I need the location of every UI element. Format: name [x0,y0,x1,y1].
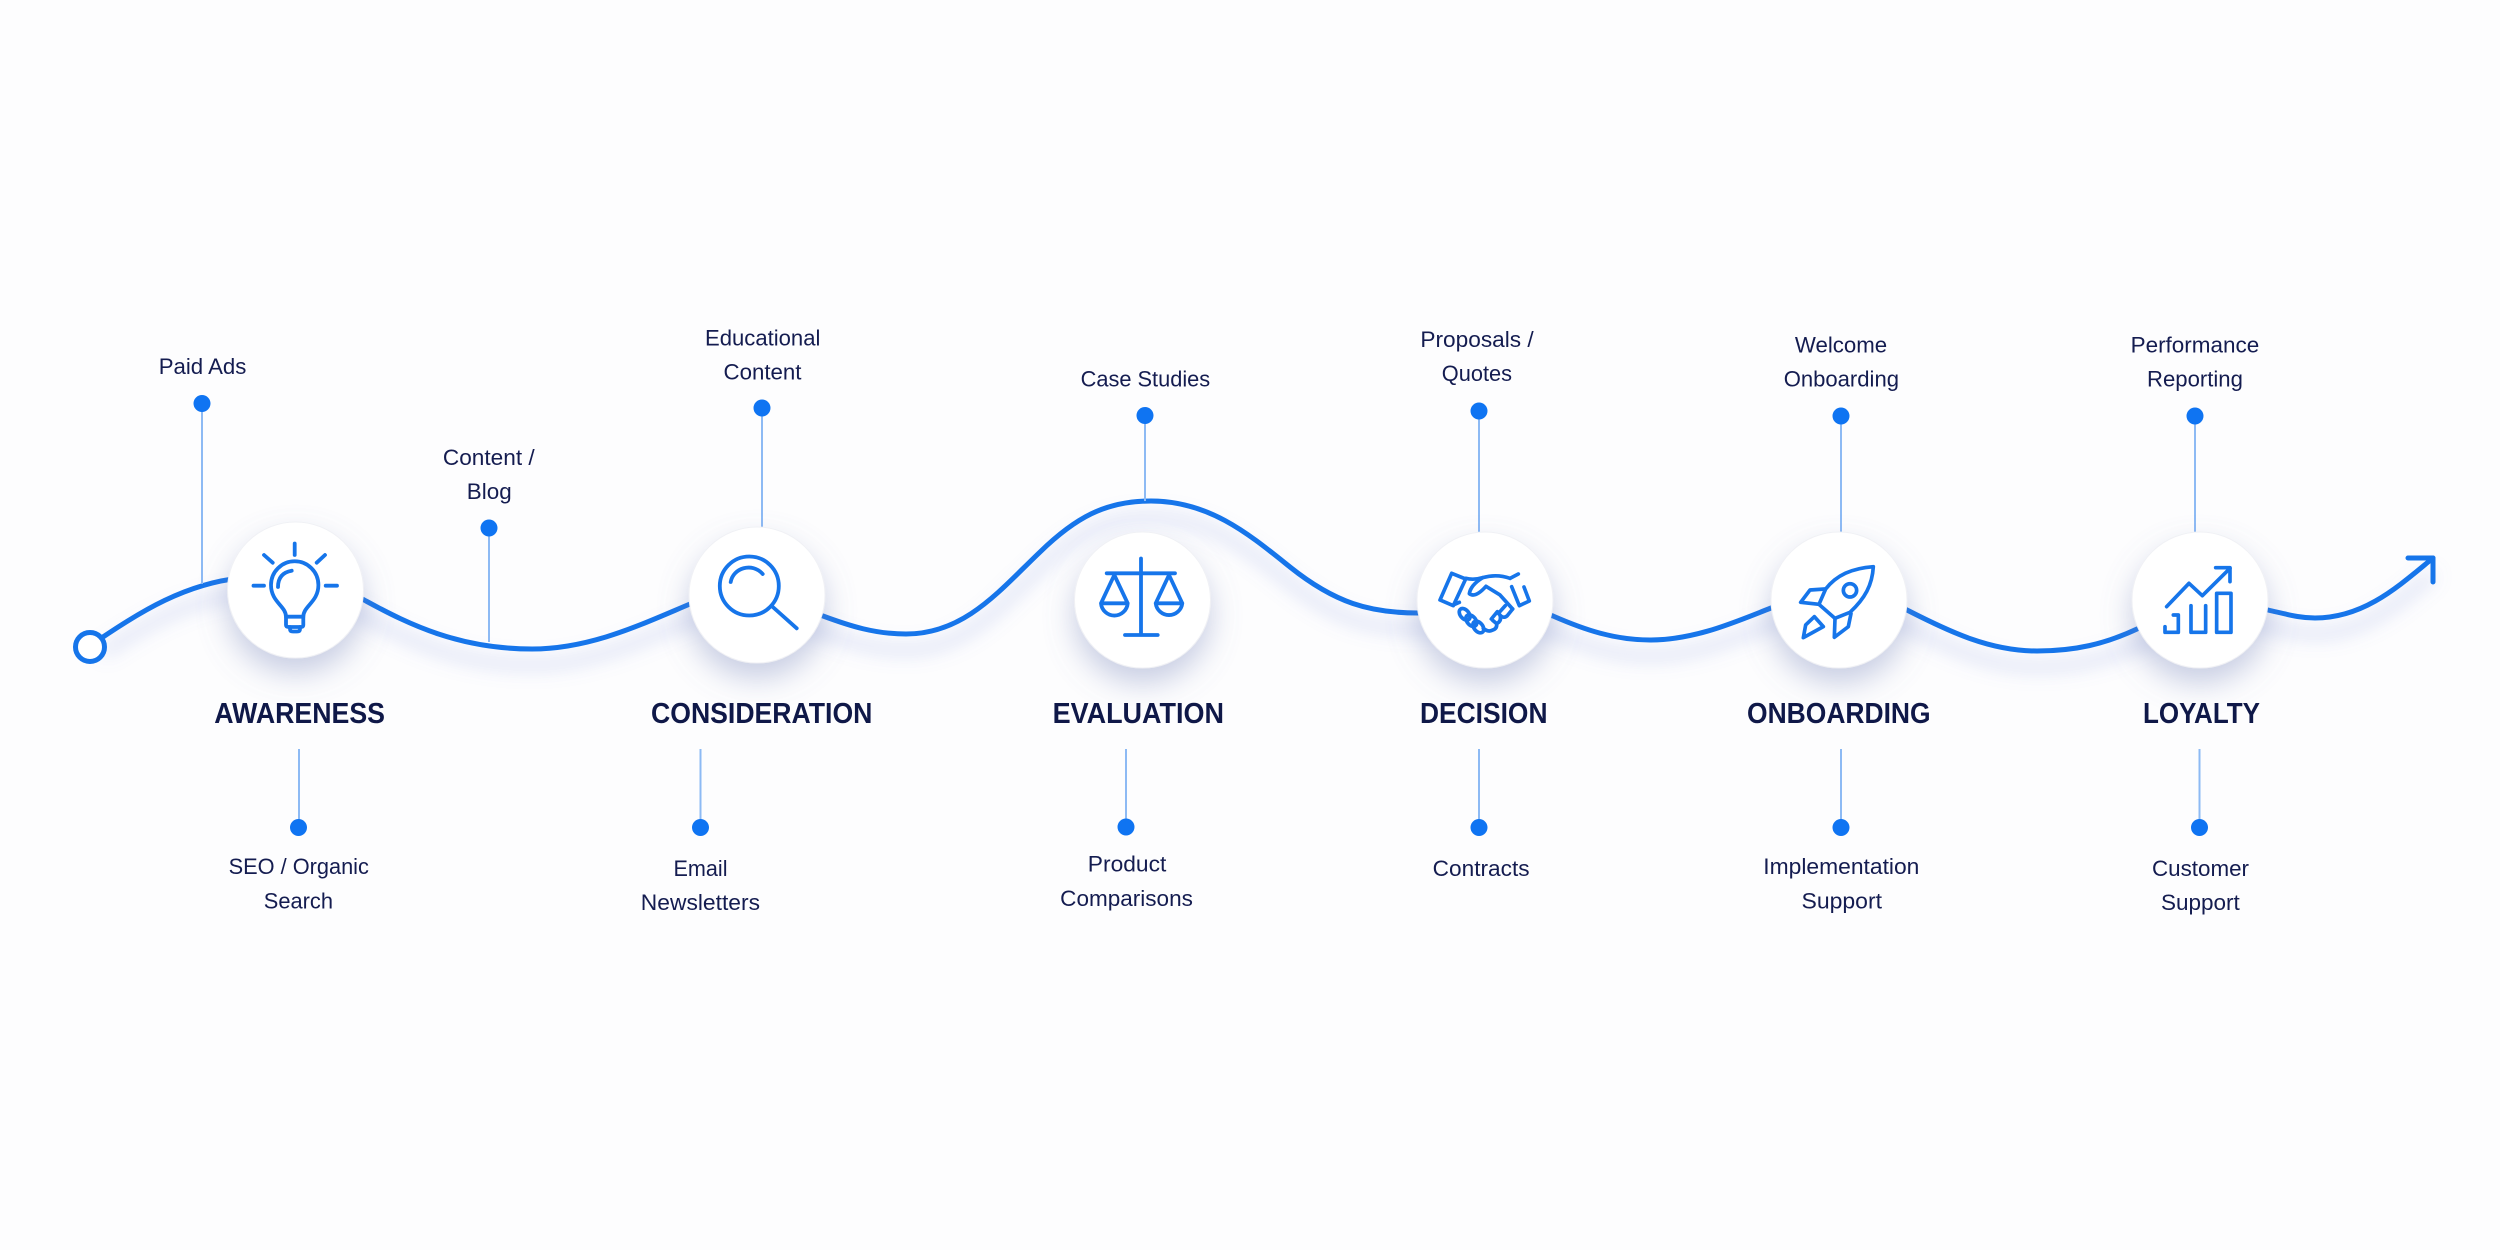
label: welcome onboarding [1784,332,1899,391]
icon badge: onboarding [1771,532,1907,668]
icon: scales [1101,558,1182,635]
label: implementation support: Support [1802,888,1883,914]
icon badge: loyalty [2132,532,2268,668]
connector: customer support [2191,749,2208,836]
label: seo organic search: Search [264,888,333,914]
connector: educational content [754,400,770,528]
journey curve line [103,501,2433,651]
icon badge: awareness [228,522,364,658]
icon: handshake [1440,573,1529,635]
label: implementation support [1763,854,1919,914]
label: welcome onboarding: Onboarding [1784,366,1899,391]
arrow head [2408,558,2433,582]
label: seo organic search [229,854,369,914]
connector: contracts [1470,749,1488,836]
label: proposals quotes [1420,327,1534,386]
label: email newsletters [641,856,760,915]
label: proposals quotes: Quotes [1442,361,1512,386]
label: educational content: Educational [705,326,820,351]
connector: welcome onboarding [1832,408,1850,533]
label: email newsletters: Email [674,856,728,881]
connector: content blog [480,520,498,642]
label: product comparisons [1060,851,1193,911]
icon badge: decision [1417,532,1553,668]
label: performance reporting: Reporting [2147,366,2243,391]
stage: decision [1417,327,1553,881]
label: customer support: Support [2161,890,2241,915]
connector: product comparisons [1118,749,1134,836]
connector: implementation [1832,749,1850,836]
stage: awareness [159,354,535,914]
label: email newsletters: Newsletters [641,890,760,915]
heading: evaluation: EVALUATION [1053,698,1224,730]
label: paid ads: Paid Ads [159,354,246,379]
heading: onboarding: ONBOARDING [1747,698,1931,730]
connector: proposals [1470,402,1488,533]
label: educational content [705,326,820,384]
icon: rocket [1801,567,1873,638]
label: performance reporting [2131,332,2259,391]
label: implementation support: Implementation [1763,854,1919,879]
label: product comparisons: Comparisons [1060,886,1193,911]
heading: decision: DECISION [1420,698,1548,730]
stage: onboarding [1747,332,1931,913]
label: case studies: Case Studies [1081,366,1210,391]
label: customer support [2152,856,2249,915]
connector: paid ads [194,395,210,584]
icon: light bulb [254,544,337,632]
label: seo organic search: SEO / Organic [229,854,369,879]
label: welcome onboarding: Welcome [1795,332,1887,357]
label: performance reporting: Performance [2131,332,2259,357]
connector: case studies [1136,407,1154,501]
label: educational content: Content [724,359,802,384]
start marker [76,632,104,662]
label: content blog [443,445,535,504]
connector: performance reporting [2186,408,2204,533]
stage: consideration [641,326,872,915]
heading: loyalty: LOYALTY [2143,698,2260,730]
label: content blog: Content / [443,445,535,470]
stage: evaluation [1053,366,1224,911]
connector: email [692,749,709,836]
label: proposals quotes: Proposals / [1420,327,1534,352]
label: contracts: Contracts [1433,856,1530,881]
label: customer support: Customer [2152,856,2249,881]
icon badge: consideration [689,527,825,663]
icon: growth chart [2165,568,2231,632]
icon: magnifier [720,556,797,628]
label: product comparisons: Product [1088,851,1167,876]
heading: awareness: AWARENESS [214,698,385,730]
label: content blog: Blog [467,479,512,504]
connector: seo [290,749,307,836]
heading: consideration: CONSIDERATION [651,698,872,730]
journey curve shadow [103,517,2433,667]
icon badge: evaluation [1074,532,1210,668]
stage: loyalty [2131,332,2268,915]
